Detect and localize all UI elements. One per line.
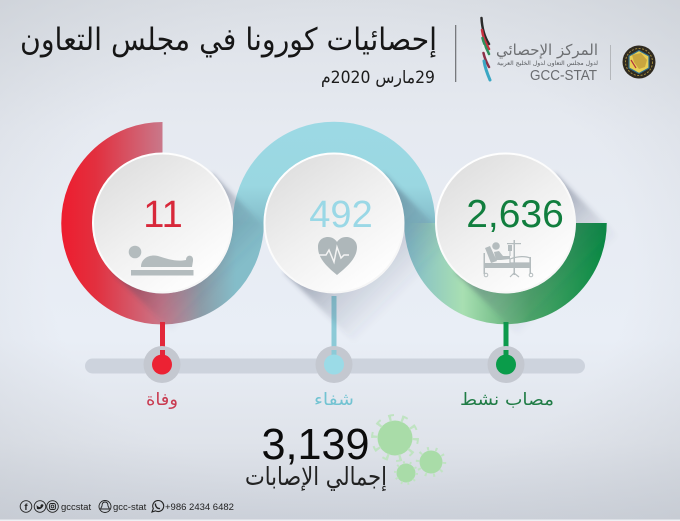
logo name arabic: المركز الإحصائي — [496, 41, 598, 60]
label: active: مصاب نشط — [460, 390, 554, 410]
small virus — [396, 462, 416, 484]
header divider — [455, 25, 456, 82]
active number: 2,636 — [466, 193, 564, 236]
icon: GCC emblem — [622, 46, 656, 78]
icon: whatsapp — [152, 501, 164, 512]
icon: virus cluster — [372, 415, 444, 484]
handle: gccstat: gccstat — [61, 502, 91, 513]
disc shadows — [113, 174, 619, 343]
icon: twitter — [34, 501, 46, 512]
title: إحصائيات كورونا في مجلس التعاون — [20, 22, 437, 58]
social media footer — [20, 500, 234, 513]
label: deaths: وفاة — [146, 390, 178, 410]
big virus — [372, 415, 418, 461]
date: 29مارس 2020م — [321, 68, 435, 88]
deaths number: 11 — [143, 194, 183, 236]
icon: lying patient — [129, 246, 194, 276]
total label: إجمالي الإصابات — [245, 462, 387, 492]
icon: snapchat — [99, 500, 111, 512]
panel: active — [436, 154, 575, 292]
logo subtitle arabic: لدول مجلس التعاون لدول الخليج العربية — [497, 60, 598, 67]
marker: deaths — [144, 346, 180, 383]
recovered number: 492 — [309, 194, 373, 236]
panel: deaths — [93, 154, 232, 292]
logo name latin: GCC-STAT — [530, 68, 597, 84]
marker: recovered — [316, 346, 352, 383]
timeline — [85, 346, 585, 383]
phone number: +986 2434 6482 — [165, 502, 234, 513]
marker: active — [488, 346, 524, 383]
icon: ribbon — [482, 18, 490, 80]
medium virus — [418, 448, 444, 476]
ring: green arc — [420, 223, 591, 309]
logo divider — [610, 45, 611, 80]
icon: facebook — [20, 501, 32, 513]
logo: GCC-STAT — [482, 18, 598, 84]
icon: instagram — [47, 501, 58, 512]
connector stems — [160, 296, 508, 360]
ring: teal arc — [248, 137, 420, 223]
icon: facebook: f — [24, 502, 28, 513]
panel: recovered — [264, 154, 404, 292]
label: recovered: شفاء — [314, 390, 354, 410]
ring: red arc — [77, 138, 248, 309]
icon: heart pulse — [318, 237, 357, 275]
handle: gcc-stat: gcc-stat — [113, 502, 147, 513]
icon: hospital bed — [484, 240, 533, 277]
total number: 3,139 — [262, 420, 370, 469]
